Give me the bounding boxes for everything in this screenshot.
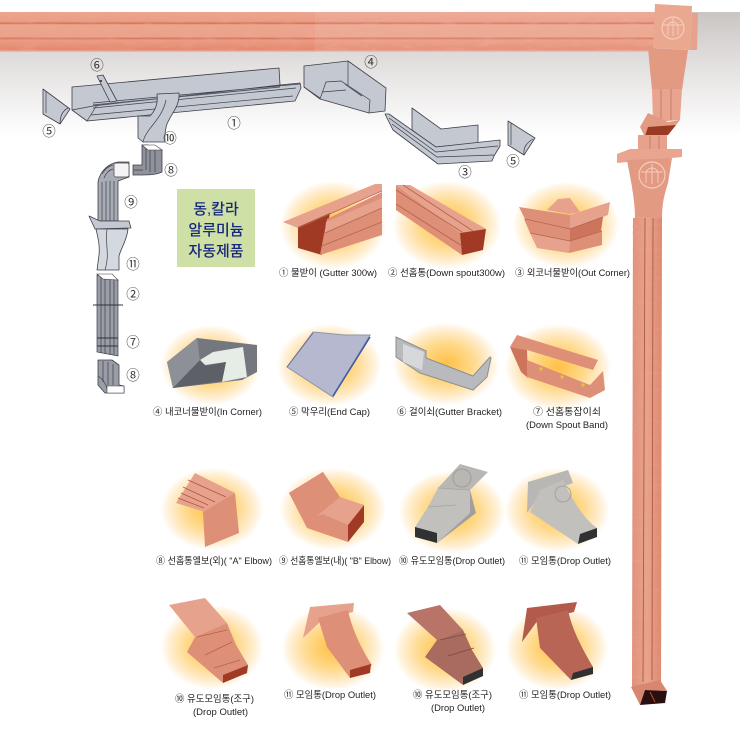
photo 10: copper outlet (169, 598, 248, 683)
labels row 4 (175, 689, 611, 718)
photo 7: down spout band (510, 335, 605, 398)
diagram numbers: ① (227, 116, 241, 131)
diagram numbers: ③ (458, 165, 472, 180)
labels row 2 (153, 406, 608, 431)
labels row 2: ⑤ 막우리(End Cap) (289, 407, 370, 418)
diagram: drop outlet 10 (138, 93, 179, 142)
diagram numbers: ⑨ (124, 195, 138, 210)
labels row 2: (Down Spout Band) (526, 420, 608, 431)
labels row 1: ② 선홈통(Down spout300w) (388, 267, 505, 279)
diagram: outer corner (385, 108, 500, 164)
diagram: gutter (72, 68, 301, 121)
photo 4: inner corner (167, 338, 257, 388)
labels row 2: ⑥ 걸이쇠(Gutter Bracket) (397, 406, 502, 418)
diagram numbers: ⑤ (42, 124, 56, 139)
top gutter rail (0, 12, 656, 52)
diagram: end cap left (43, 89, 70, 124)
photo 11: brown outlet (522, 602, 593, 680)
copper downspout assembly (617, 4, 698, 705)
green label box (177, 189, 255, 267)
labels row 4: (Drop Outlet) (431, 703, 485, 714)
labels row 1 (279, 267, 630, 279)
photo 11: grey outlet (527, 470, 597, 544)
background gradient (0, 12, 740, 136)
diagram numbers: ⑪ (126, 257, 140, 272)
green label box: 알루미늄 (188, 222, 244, 239)
photo 10: grey outlet (415, 464, 488, 543)
labels row 3 (156, 555, 611, 567)
labels row 4: ⑪ 모임통(Drop Outlet) (284, 689, 376, 701)
diagram numbers: ④ (364, 55, 378, 70)
diagram numbers: ⑥ (90, 58, 104, 73)
labels row 4: (Drop Outlet) (193, 707, 248, 718)
diagram numbers: ⑧ (164, 163, 178, 178)
diagram numbers: ⑦ (126, 335, 140, 350)
labels row 3: ⑪ 모임통(Drop Outlet) (519, 555, 611, 567)
diagram: gutter bracket (97, 75, 117, 102)
labels row 4: ⑪ 모임통(Drop Outlet) (519, 689, 611, 701)
photo 9: B elbow (289, 472, 364, 542)
diagram numbers (42, 55, 520, 383)
photo 2: downspout (396, 185, 486, 255)
diagram numbers: ② (126, 287, 140, 302)
green label box: 자동제품 (188, 243, 244, 260)
photo 5: end cap (287, 332, 370, 397)
labels row 1: ① 물받이 (Gutter 300w) (279, 268, 377, 279)
diagram numbers: ⑧ (126, 368, 140, 383)
diagram: elbow 8 bottom (98, 360, 124, 393)
labels row 1: ③ 외코너물받이(Out Corner) (515, 267, 630, 279)
diagram numbers: ⑩ (163, 131, 177, 146)
photo 1: gutter (283, 184, 382, 255)
labels row 2: ④ 내코너물받이(In Corner) (153, 407, 262, 418)
diagram: end cap right (508, 121, 535, 155)
labels row 3: ⑧ 선홈통엘보(외)( "A" Elbow) (156, 555, 272, 567)
green label box: 동,칼라 (193, 201, 239, 218)
photo 11: copper outlet (303, 603, 372, 678)
labels row 3: ⑨ 선홈통엘보(내)( "B" Elbow) (279, 555, 391, 567)
photo 6: gutter bracket (396, 337, 491, 390)
diagram: downspout 2 with band 7 (93, 274, 123, 356)
labels row 3: ⑩ 유도모임통(Drop Outlet) (399, 555, 505, 567)
diagram: outlet 11 with flange (89, 216, 131, 270)
labels row 4: ⑩ 유도모임통(조구) (413, 689, 492, 701)
glows (161, 181, 619, 692)
photo 10: brown outlet (407, 605, 483, 685)
labels row 2: ⑦ 선홈통잡이쇠 (533, 406, 601, 418)
diagram: elbow 9 (98, 162, 129, 221)
diagram: elbow 8 top (133, 145, 162, 175)
diagram: inner corner (304, 61, 386, 113)
photo 3: outer corner (519, 198, 610, 253)
labels row 4: ⑩ 유도모임통(조구) (175, 693, 254, 705)
photo 8: A elbow (176, 473, 239, 547)
diagram numbers: ⑤ (506, 154, 520, 169)
